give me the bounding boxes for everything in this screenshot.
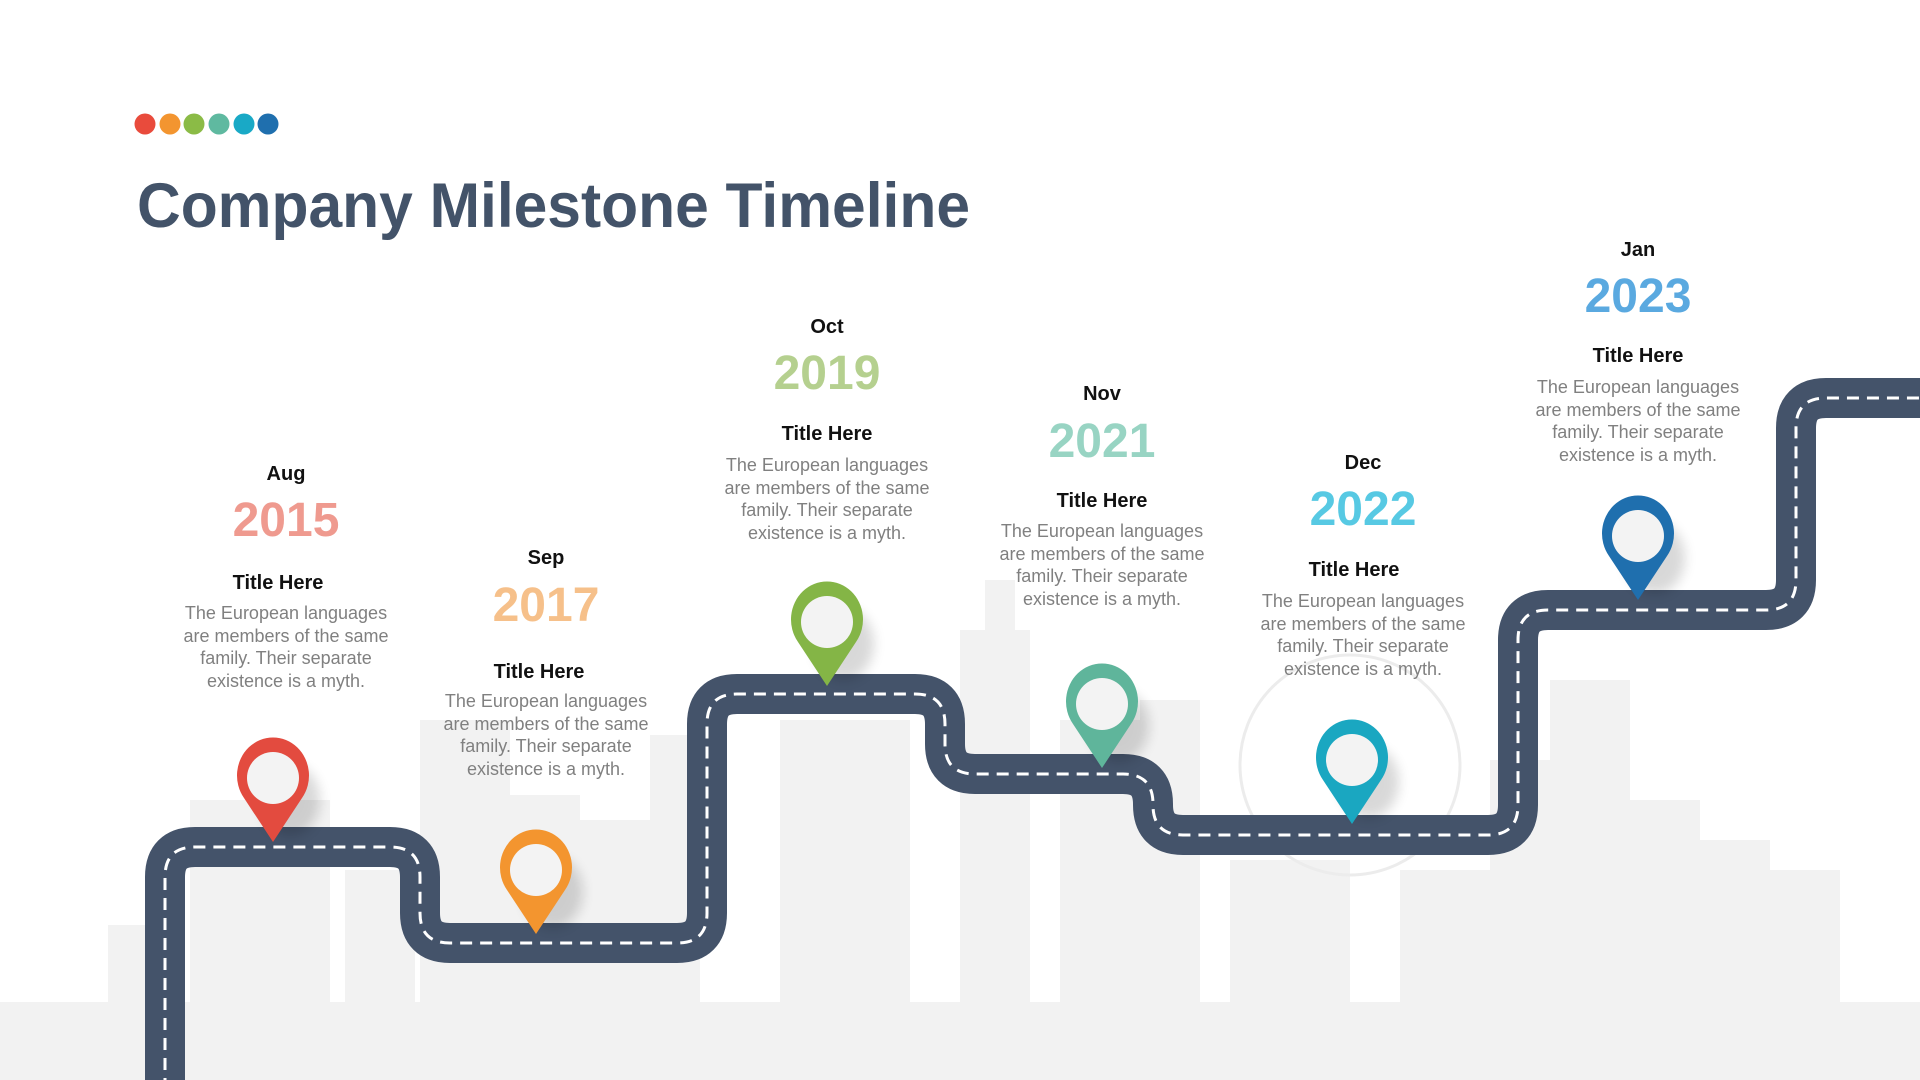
milestone text: 2021: are members of the same <box>999 544 1205 564</box>
milestone text: 2017: family. Their separate <box>460 736 632 756</box>
milestone text: 2023: Title Here <box>1593 345 1683 367</box>
milestone text: 2017: Title Here <box>494 661 584 683</box>
pin: 2017 <box>500 829 583 934</box>
milestone text: 2023: Jan <box>1621 239 1655 261</box>
dots <box>134 114 278 134</box>
milestone text: 2022: The European languages <box>1262 591 1464 611</box>
milestone text: 2023: family. Their separate <box>1552 422 1724 442</box>
milestone text: 2022: are members of the same <box>1260 614 1466 634</box>
milestone text: 2017: Sep <box>528 547 564 569</box>
milestone text: 2019 <box>724 316 930 543</box>
milestone text: 2021: family. Their separate <box>1016 566 1188 586</box>
road <box>165 398 1920 1080</box>
title: Company Milestone Timeline <box>137 171 970 241</box>
milestone text: 2023: The European languages <box>1537 377 1739 397</box>
milestone text: 2015: family. Their separate <box>200 648 372 668</box>
milestone text: 2017: The European languages <box>445 691 647 711</box>
milestone text: 2021: Nov <box>1083 383 1122 405</box>
milestone text: 2015: 2015 <box>233 494 339 547</box>
milestone text: 2015: Aug <box>267 463 305 485</box>
milestone text: 2023: existence is a myth. <box>1559 445 1717 465</box>
milestone text: 2015: are members of the same <box>183 626 389 646</box>
milestone text: 2019: Oct <box>810 316 844 338</box>
milestone text: 2022: existence is a myth. <box>1284 659 1442 679</box>
milestone text: 2022: family. Their separate <box>1277 636 1449 656</box>
milestone text: 2015: The European languages <box>185 603 387 623</box>
milestone text: 2019: 2019 <box>774 347 880 400</box>
skyline background <box>0 580 1920 1080</box>
milestone text: 2021: 2021 <box>1049 415 1155 468</box>
milestone text: 2019: Title Here <box>782 423 872 445</box>
milestone text: 2019: existence is a myth. <box>748 523 906 543</box>
milestone text: 2015: existence is a myth. <box>207 671 365 691</box>
milestone text: 2023: 2023 <box>1585 270 1691 323</box>
pin: 2022 <box>1316 719 1399 824</box>
milestone text: 2023: are members of the same <box>1535 400 1741 420</box>
milestone text: 2023 <box>1535 239 1741 465</box>
milestone text: 2019: The European languages <box>726 455 928 475</box>
milestone text: 2017: are members of the same <box>443 714 649 734</box>
milestone text: 2015 <box>183 463 389 691</box>
milestone text: 2021 <box>999 383 1205 609</box>
milestone text: 2022 <box>1260 452 1466 679</box>
milestone text: 2021: The European languages <box>1001 521 1203 541</box>
milestone text: 2022: Title Here <box>1309 559 1399 581</box>
milestone text: 2022: Dec <box>1345 452 1381 474</box>
pin: 2015 <box>237 737 320 842</box>
milestone text: 2021: existence is a myth. <box>1023 589 1181 609</box>
milestone text: 2021: Title Here <box>1057 490 1147 512</box>
pin: 2019 <box>791 581 874 686</box>
milestone text: 2017 <box>443 547 649 779</box>
milestone text: 2019: family. Their separate <box>741 500 913 520</box>
milestone text: 2022: 2022 <box>1310 483 1416 536</box>
milestone text: 2017: 2017 <box>493 579 599 632</box>
milestone text: 2019: are members of the same <box>724 478 930 498</box>
milestone text: 2017: existence is a myth. <box>467 759 625 779</box>
milestone text: 2015: Title Here <box>233 572 323 594</box>
pin: 2023 <box>1602 495 1685 600</box>
pin: 2021 <box>1066 663 1149 768</box>
